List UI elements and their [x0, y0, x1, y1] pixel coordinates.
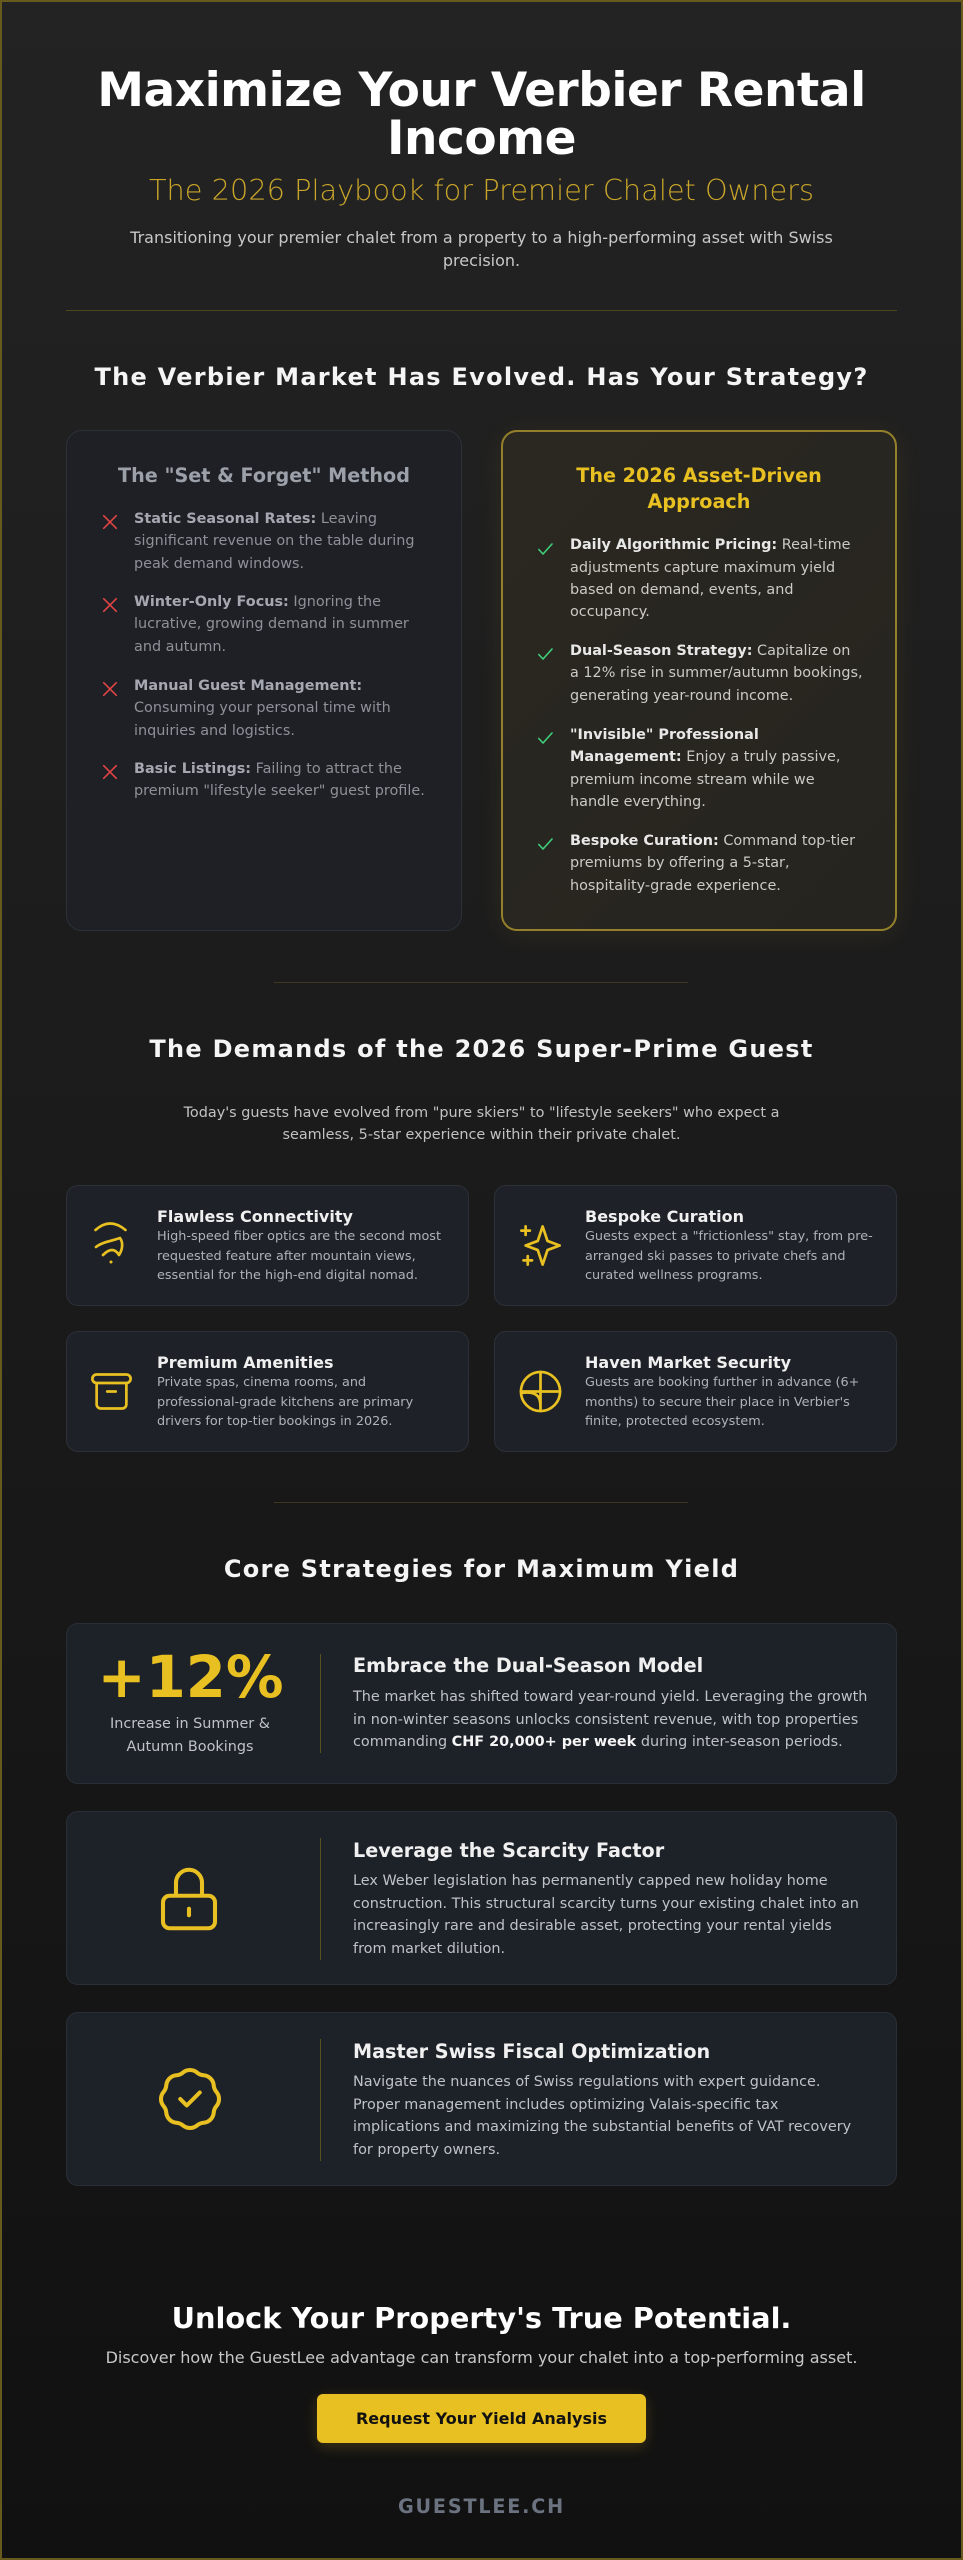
list item: invisible professional management: handle everything. — [570, 794, 706, 810]
list item: invisible professional management — [570, 727, 840, 810]
list item: bespoke curation — [570, 833, 856, 894]
card text: drivers for top-tier bookings in 2026. — [157, 1414, 392, 1429]
title: Maximize Your Verbier Rental — [97, 63, 866, 118]
intro text — [130, 228, 833, 270]
strategy text: from market dilution. — [353, 1940, 505, 1956]
strategy card: swiss fiscal optimization — [66, 2012, 897, 2186]
card text: Guests expect a "frictionless" stay, from pre- — [585, 1229, 873, 1244]
stat caption: Increase in Summer & — [110, 1716, 270, 1732]
icon: cross — [102, 764, 118, 780]
strategy text: construction. This structural scarcity turns your existing chalet into an — [353, 1896, 859, 1912]
list item: bespoke curation: premiums by offering a 5-star, — [570, 855, 790, 871]
card title: Haven Market Security — [585, 1353, 791, 1372]
card text: months) to secure their place in Verbier's — [585, 1395, 850, 1410]
card text — [157, 1375, 413, 1429]
intro text: precision. — [443, 251, 520, 270]
icon: cross — [102, 598, 118, 612]
card text: curated wellness programs. — [585, 1268, 763, 1283]
card: flawless connectivity — [66, 1185, 469, 1306]
panel: 2026 asset-driven approach — [501, 430, 897, 931]
card text: Guests are booking further in advance (6+ — [585, 1375, 859, 1390]
card text: finite, protected ecosystem. — [585, 1414, 765, 1429]
panel heading: Approach — [648, 490, 750, 513]
card: bespoke curation — [494, 1185, 897, 1306]
guest intro text: seamless, 5-star experience within their private chalet. — [282, 1127, 681, 1143]
list item: basic listings — [134, 761, 425, 799]
card title: Bespoke Curation — [585, 1207, 744, 1226]
list item: invisible professional management: Management: Enjoy a truly passive, — [570, 749, 840, 765]
icon: check — [538, 648, 553, 660]
list item: manual guest management — [134, 678, 391, 739]
card title: Flawless Connectivity — [157, 1207, 353, 1226]
list item: bespoke curation: hospitality-grade experience. — [570, 878, 781, 894]
icon: archive box — [91, 1373, 132, 1410]
list item: static seasonal rates — [134, 511, 415, 572]
list item: bespoke curation: Bespoke Curation: Command top-tier — [570, 833, 855, 849]
panel heading — [576, 464, 822, 513]
list item: daily algorithmic pricing: based on demand, events, and — [570, 582, 793, 598]
call to action heading: Unlock Your Property's True Potential. — [172, 2301, 791, 2335]
strategy text: commanding CHF 20,000+ per week during inter-season periods. — [353, 1734, 843, 1750]
guest intro text: Today's guests have evolved from "pure skiers" to "lifestyle seekers" who expect a — [184, 1105, 779, 1121]
strategy text: Lex Weber legislation has permanently capped new holiday home — [353, 1873, 828, 1889]
heading: guest demands: The Demands of the 2026 Super-Prime Guest — [149, 1035, 814, 1063]
title — [97, 63, 866, 166]
card: haven market security — [494, 1331, 897, 1452]
card text: professional-grade kitchens are primary — [157, 1395, 413, 1410]
strategy title: Master Swiss Fiscal Optimization — [353, 2040, 710, 2063]
call to action text: Discover how the GuestLee advantage can transform your chalet into a top-performing asset. — [106, 2348, 857, 2367]
card text: essential for the high-end digital nomad. — [157, 1268, 418, 1283]
list item: basic listings: Basic Listings: Failing to attract the — [134, 761, 402, 777]
list item: daily algorithmic pricing — [570, 537, 850, 620]
strategy text — [353, 2074, 851, 2158]
card text — [157, 1229, 441, 1283]
card text: High-speed fiber optics are the second most — [157, 1229, 441, 1244]
card text — [585, 1229, 873, 1283]
list item: winter-only focus: Winter-Only Focus: Ignoring the — [134, 594, 381, 610]
heading: market evolved: The Verbier Market Has Evolved. Has Your Strategy? — [94, 363, 869, 391]
list item: static seasonal rates: significant revenue on the table during — [134, 533, 415, 549]
strategy text: The market has shifted toward year-round yield. Leveraging the growth — [353, 1689, 867, 1705]
list item: winter-only focus: lucrative, growing demand in summer — [134, 616, 409, 632]
icon: check — [538, 838, 553, 850]
heading: core strategies: Core Strategies for Maximum Yield — [224, 1555, 739, 1583]
list item: static seasonal rates: Static Seasonal Rates: Leaving — [134, 511, 377, 527]
panel: set and forget method — [66, 430, 462, 931]
icon: check — [538, 543, 553, 555]
card text: Private spas, cinema rooms, and — [157, 1375, 366, 1390]
list item: basic listings: premium "lifestyle seeker" guest profile. — [134, 783, 425, 799]
intro text: Transitioning your premier chalet from a property to a high-performing asset with Swiss — [130, 228, 833, 247]
icon: badge check — [159, 2068, 221, 2130]
list item: manual guest management: Consuming your personal time with — [134, 700, 391, 716]
panel heading: The "Set & Forget" Method — [118, 464, 410, 487]
icon: cross — [102, 514, 118, 530]
list item: static seasonal rates: peak demand windows. — [134, 556, 304, 572]
strategy title: Leverage the Scarcity Factor — [353, 1839, 664, 1862]
strategy title: Embrace the Dual-Season Model — [353, 1654, 703, 1677]
strategy card: dual-season model — [66, 1623, 897, 1784]
strategy text — [352, 1689, 867, 1750]
strategy text: Navigate the nuances of Swiss regulations with expert guidance. — [353, 2074, 820, 2090]
list item: dual-season strategy: a 12% rise in summer/autumn bookings, — [570, 665, 863, 681]
list item: invisible professional management: premium income stream while we — [570, 772, 815, 788]
list item: dual-season strategy: generating year-round income. — [570, 688, 793, 704]
list item: daily algorithmic pricing: adjustments capture maximum yield — [570, 560, 835, 576]
list item: manual guest management: inquiries and logistics. — [134, 723, 295, 739]
list item: manual guest management: Manual Guest Management: — [134, 678, 362, 694]
subtitle: The 2026 Playbook for Premier Chalet Owners — [149, 173, 814, 207]
list item: daily algorithmic pricing: occupancy. — [570, 604, 650, 620]
list item: dual-season strategy — [570, 643, 863, 704]
stat caption: Autumn Bookings — [126, 1739, 254, 1755]
icon: globe — [520, 1370, 562, 1412]
icon: cross — [102, 682, 118, 696]
button: request yield analysis: Request Your Yield Analysis — [356, 2409, 607, 2428]
icon: lock — [160, 1868, 218, 1930]
list item: dual-season strategy: Dual-Season Strategy: Capitalize on — [570, 643, 850, 659]
guest intro text — [184, 1105, 779, 1143]
strategy text: increasingly rare and desirable asset, protecting your rental yields — [353, 1918, 832, 1934]
icon: check — [538, 732, 553, 744]
icon: sparkles — [520, 1225, 561, 1266]
list item: winter-only focus: and autumn. — [134, 639, 226, 655]
panel heading: The 2026 Asset-Driven — [576, 464, 822, 487]
footer brand: GUESTLEE.CH — [398, 2495, 565, 2518]
strategy card: scarcity factor — [66, 1811, 897, 1985]
strategy text — [353, 1873, 859, 1956]
button: request yield analysis — [317, 2394, 646, 2443]
card title: Premium Amenities — [157, 1353, 334, 1372]
stat caption — [110, 1716, 270, 1755]
stat: +12%: +12% — [97, 1644, 284, 1711]
card: premium amenities — [66, 1331, 469, 1452]
strategy text: Proper management includes optimizing Valais-specific tax — [353, 2096, 778, 2112]
card text — [585, 1375, 859, 1429]
card text: requested feature after mountain views, — [157, 1249, 416, 1264]
strategy text: implications and maximizing the substantial benefits of VAT recovery — [353, 2119, 851, 2135]
list item: invisible professional management: "Invisible" Professional — [570, 727, 759, 743]
list item: daily algorithmic pricing: Daily Algorithmic Pricing: Real-time — [570, 537, 850, 553]
strategy text: in non-winter seasons unlocks consistent revenue, with top properties — [353, 1712, 858, 1728]
card text: arranged ski passes to private chefs and — [585, 1249, 845, 1264]
title: Income — [387, 111, 576, 166]
list item: winter-only focus — [134, 594, 409, 655]
icon: wifi — [94, 1222, 127, 1264]
strategy text: for property owners. — [353, 2142, 500, 2158]
